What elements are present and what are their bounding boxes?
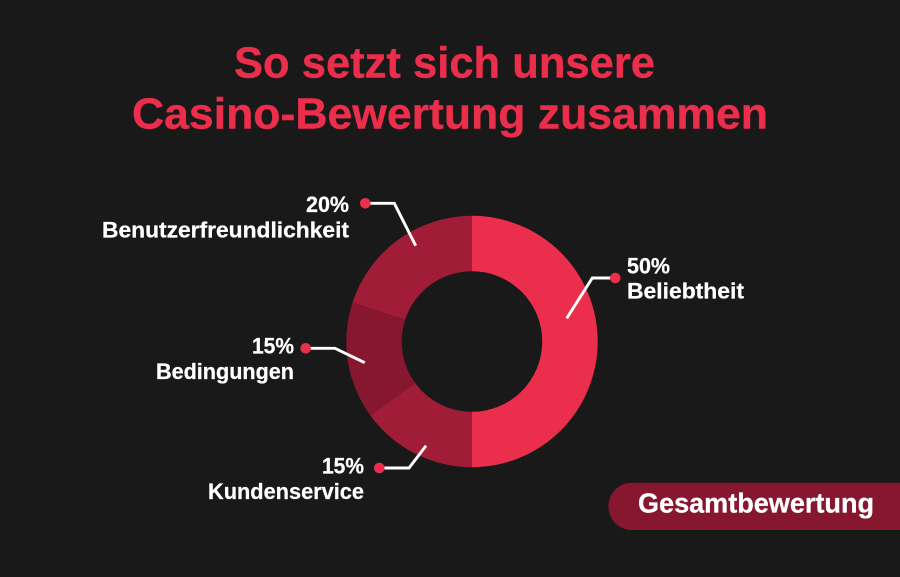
- title: So setzt sich unsere: [234, 38, 655, 88]
- donut chart: [346, 216, 598, 467]
- callout: Bedingungen: Bedingungen: [156, 359, 294, 384]
- badge: Gesamtbewertung: [608, 483, 900, 530]
- callout: Beliebtheit: Beliebtheit: [627, 278, 745, 303]
- callout: Kundenservice: [208, 446, 426, 504]
- callout: Beliebtheit: [567, 253, 745, 318]
- callout: Benutzerfreundlichkeit: Benutzerfreundlichkeit: [102, 218, 350, 242]
- segment: Benutzerfreundlichkeit 20%: [352, 216, 472, 320]
- callout: Benutzerfreundlichkeit: [102, 192, 416, 246]
- title: [132, 38, 768, 138]
- badge: Gesamtbewertung: Gesamtbewertung: [638, 487, 874, 518]
- callout: Kundenservice: 15%: [322, 453, 364, 478]
- callout: Beliebtheit: 50%: [627, 253, 670, 278]
- segment: Beliebtheit 50%: [472, 216, 598, 467]
- segment: Bedingungen 15%: [346, 303, 415, 415]
- callout: Kundenservice: Kundenservice: [208, 479, 364, 504]
- callout: Benutzerfreundlichkeit: 20%: [306, 192, 349, 217]
- segment: Kundenservice 15%: [370, 383, 472, 467]
- title: Casino-Bewertung zusammen: [132, 90, 768, 138]
- callout: Bedingungen: [156, 333, 365, 384]
- callout: Bedingungen: 15%: [252, 333, 294, 358]
